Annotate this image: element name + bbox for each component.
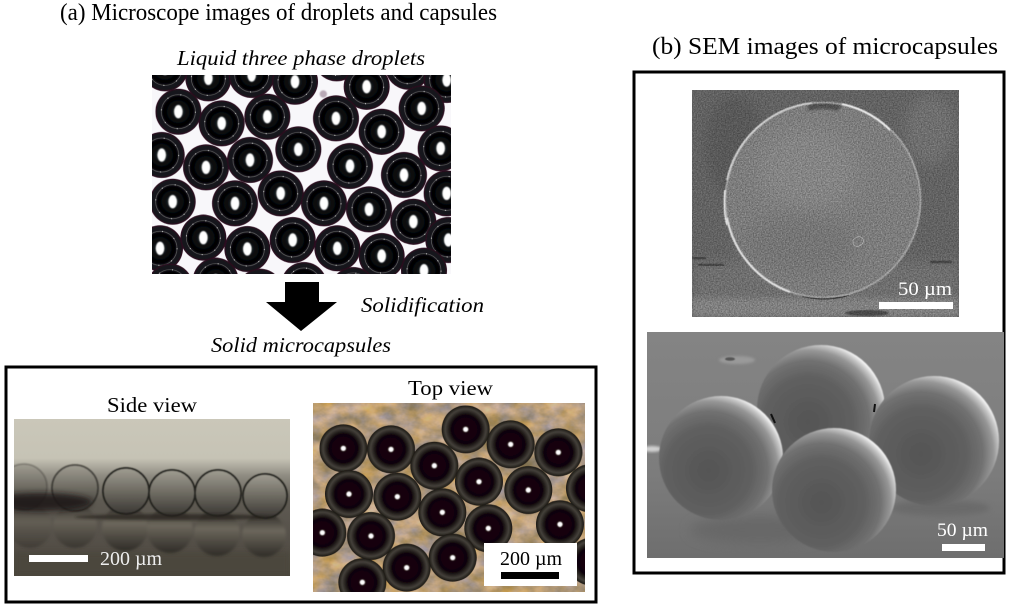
- capsule: right: [869, 376, 999, 506]
- scale bar: side view: 200 µm: [100, 548, 162, 570]
- upper row of capsules: [1, 464, 287, 518]
- image: liquid three phase droplets micrograph: [152, 75, 451, 274]
- image: SEM single capsule: [692, 90, 959, 317]
- lower row of capsules: [8, 504, 286, 557]
- panel: solid microcapsules frame: [0, 367, 616, 606]
- label: top view: Top view: [408, 376, 494, 400]
- scale bar: top view: [484, 543, 577, 586]
- capsule: left: [659, 396, 783, 520]
- image: side view micrograph: [0, 419, 290, 576]
- image: top view micrograph: [313, 403, 585, 592]
- scale bar: SEM bottom: [938, 524, 988, 551]
- arrow: solidification block arrow: [266, 282, 337, 331]
- scale bar: SEM top: [879, 282, 953, 309]
- scale bar: SEM top: 50 µm: [898, 279, 952, 300]
- label: solid microcapsules: Solid microcapsules: [211, 333, 391, 357]
- capsule: top: [757, 344, 884, 455]
- label: liquid three phase droplets: Liquid three phase droplets: [176, 46, 425, 70]
- label: side view: Side view: [107, 393, 198, 417]
- label: solidification: Solidification: [361, 293, 484, 317]
- panel: SEM images frame: [634, 72, 1004, 573]
- capsule sphere: [725, 102, 921, 298]
- scale bar: SEM bottom: 50 µm: [937, 520, 988, 541]
- heading: panel a title: (a) Microscope images of droplets and capsules: [60, 0, 497, 26]
- capsule: front: [772, 428, 896, 552]
- scale bar: side view: [29, 548, 162, 570]
- scale bar: top view: 200 µm: [500, 548, 562, 570]
- heading: panel b title: (b) SEM images of microcapsules: [652, 34, 998, 60]
- image: SEM group of four capsules: [642, 332, 1004, 558]
